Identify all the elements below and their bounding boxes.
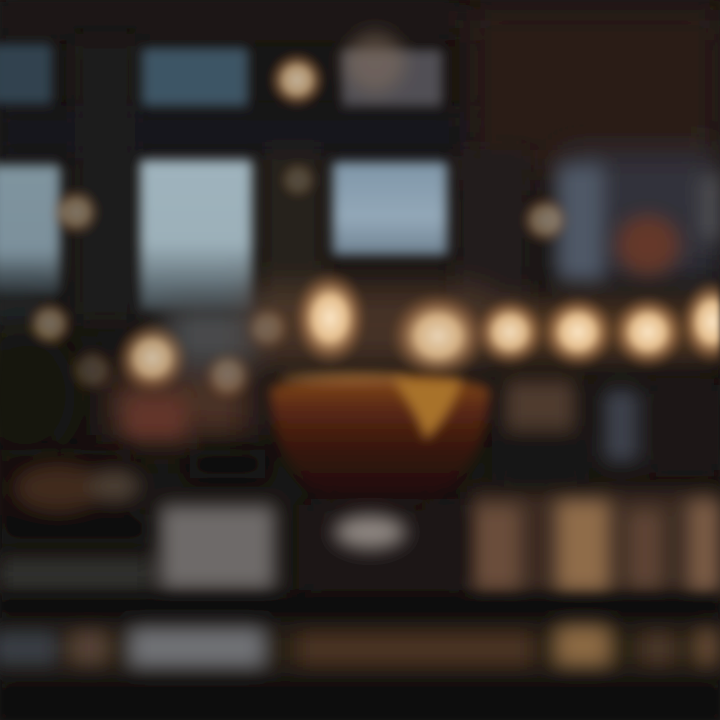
glass rim glow bbox=[280, 372, 410, 384]
windows: main row bbox=[0, 160, 447, 310]
faint window on right bbox=[558, 165, 720, 280]
pastry plate on left bbox=[0, 450, 150, 543]
objects along the bar bbox=[125, 380, 720, 480]
lower room haze bbox=[0, 285, 720, 435]
dark foliage on left bbox=[0, 333, 75, 457]
amber highlight bbox=[392, 378, 462, 440]
glass base bbox=[305, 505, 465, 590]
orange object, upper right bbox=[616, 215, 680, 275]
windows: top row bbox=[0, 44, 442, 106]
base highlight bbox=[334, 515, 406, 549]
foreground dark edge bbox=[0, 684, 720, 720]
dark bar edge bbox=[0, 596, 720, 616]
bar reflections, lower bbox=[0, 624, 720, 670]
bokeh lights bbox=[24, 32, 720, 404]
wall and ceiling tones bbox=[0, 0, 720, 320]
drink glass bbox=[270, 372, 490, 590]
warm bar surface behind reflections bbox=[470, 492, 720, 592]
bar reflections, upper bbox=[0, 500, 720, 592]
